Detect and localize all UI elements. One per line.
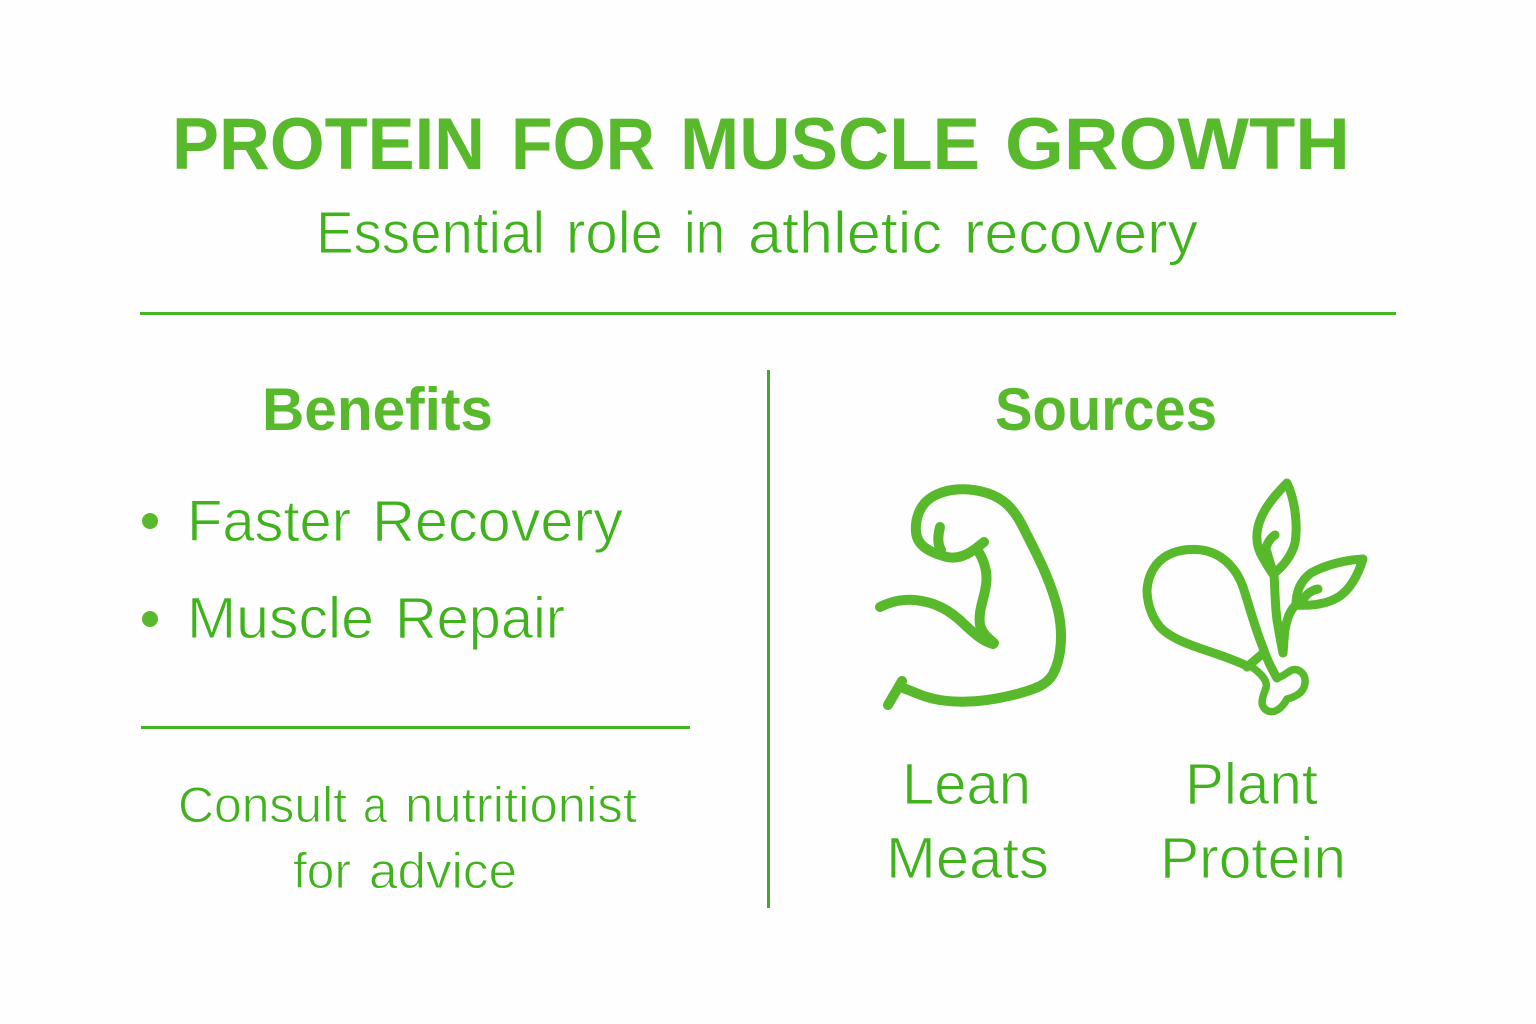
subtitle: recovery (964, 200, 1199, 266)
bullet: muscle repair: Muscle (187, 586, 374, 651)
subtitle: in (684, 200, 725, 266)
panel: benefits (142, 376, 623, 651)
bullet: faster recovery: Recovery (372, 489, 623, 554)
callout: consult a nutritionist: nutritionist (405, 777, 637, 833)
bullet: faster recovery (142, 489, 623, 554)
title (172, 104, 1350, 185)
subtitle: athletic (748, 200, 942, 266)
subtitle (316, 200, 1199, 266)
bullet: muscle repair: Repair (395, 586, 565, 651)
bullet: muscle repair (142, 586, 565, 651)
callout: consult a nutritionist: for (293, 843, 351, 899)
icon: flexed bicep (880, 489, 1061, 705)
callout: consult a nutritionist: advice (369, 843, 517, 899)
title: MUSCLE (680, 104, 980, 185)
panel: sources (880, 376, 1363, 891)
label: lean meats: Meats (886, 826, 1049, 891)
subtitle: role (566, 200, 663, 266)
callout: consult a nutritionist: Consult (178, 777, 347, 833)
label: plant protein: Plant (1185, 752, 1318, 817)
title: PROTEIN (172, 104, 485, 185)
subtitle: Essential (316, 200, 545, 266)
bullet: faster recovery: Faster (187, 489, 351, 554)
callout: consult a nutritionist (178, 777, 637, 899)
icon: drumstick and leaves (1147, 483, 1363, 712)
benefits heading: Benefits (262, 376, 493, 443)
title: FOR (511, 104, 655, 185)
title: GROWTH (1005, 104, 1350, 185)
sources heading: Sources (995, 376, 1217, 443)
label: plant protein: Protein (1160, 826, 1346, 891)
callout: consult a nutritionist: a (363, 777, 387, 833)
label: plant protein (1160, 752, 1346, 891)
label: lean meats: Lean (902, 752, 1031, 817)
label: lean meats (886, 752, 1049, 891)
